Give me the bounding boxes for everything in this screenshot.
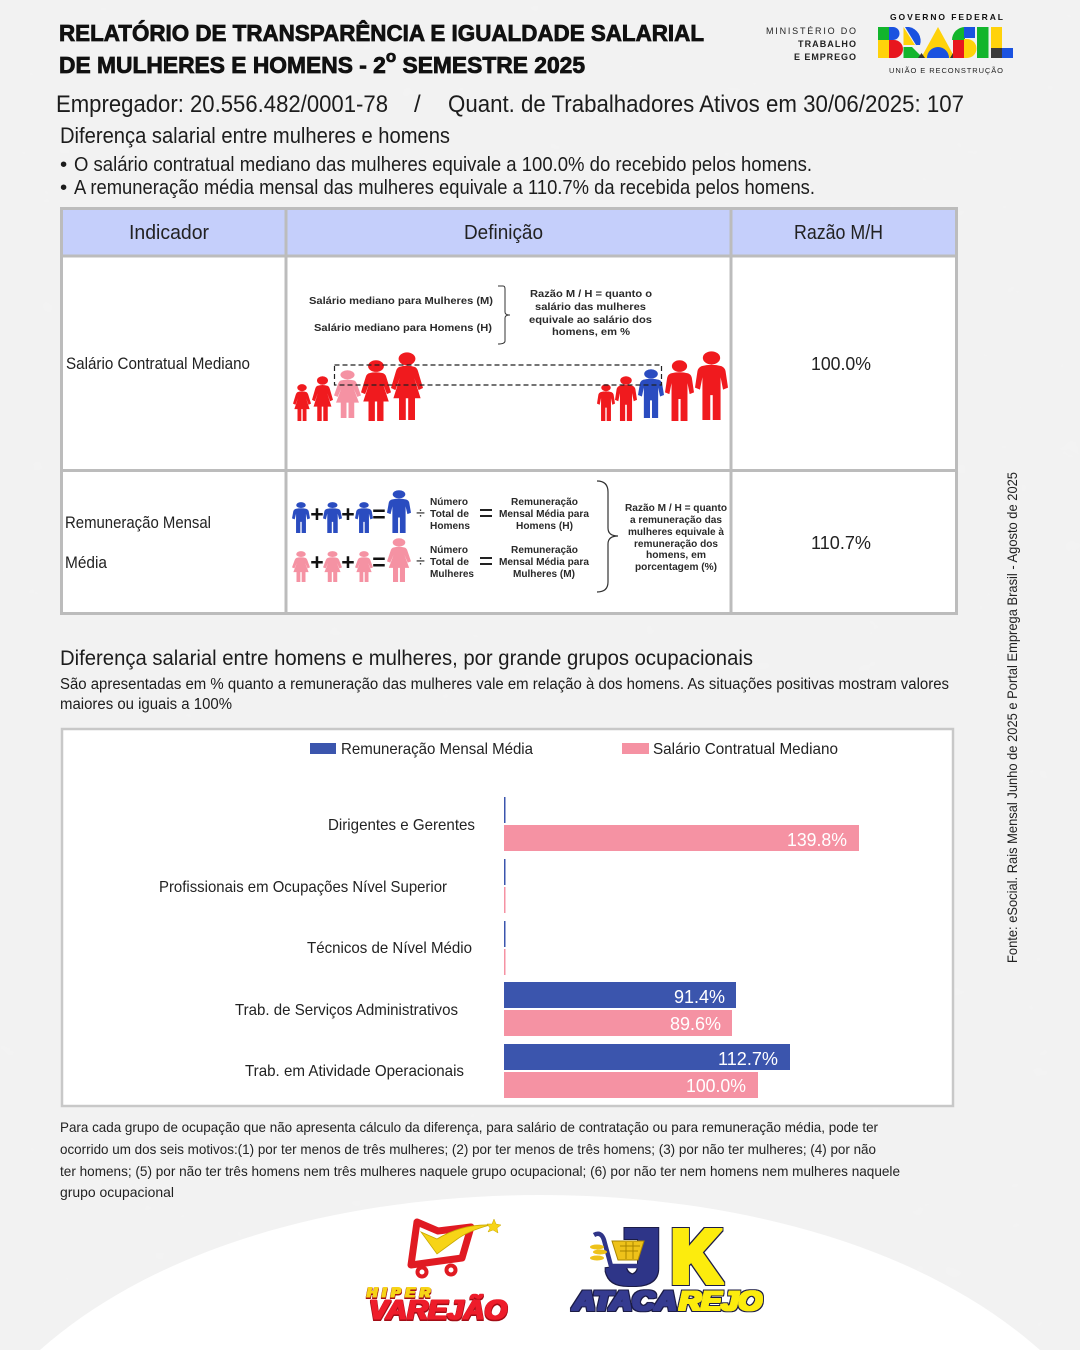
diagram: median salary definition: homens, em % <box>552 326 631 338</box>
chart description <box>60 676 949 713</box>
title: o <box>386 47 396 66</box>
chart value labels: 89.6% <box>670 1013 721 1034</box>
diagram: average pay definition: Mulheres (M) <box>513 569 575 580</box>
source note (vertical): Fonte: eSocial. Rais Mensal Junho de 2025 e Portal Emprega Brasil - Agosto de 2025 <box>1004 472 1020 963</box>
row: salário contratual mediano <box>66 353 871 374</box>
title: DE MULHERES E HOMENS - 2 <box>59 52 389 78</box>
chart category labels: Dirigentes e Gerentes <box>328 817 475 834</box>
table header: Indicador <box>129 222 209 244</box>
diagram: average pay definition: Remuneração <box>511 497 578 508</box>
diagram: median salary definition: equivale ao salário dos <box>529 314 652 326</box>
table header <box>129 222 883 244</box>
chart category labels: Técnicos de Nível Médio <box>307 940 472 957</box>
footnote <box>60 1119 900 1200</box>
footnote: Para cada grupo de ocupação que não apresenta cálculo da diferença, para salário de contratação ou para remuneração média, pode ter <box>60 1119 878 1135</box>
logo: Ministério do Trabalho e Emprego: TRABALHO <box>798 39 856 49</box>
row: remuneração mensal média: Remuneração Mensal <box>65 514 211 532</box>
chart bars <box>504 797 859 1098</box>
chart legend: Remuneração Mensal Média <box>341 741 533 758</box>
title: RELATÓRIO DE TRANSPARÊNCIA E IGUALDADE SALARIAL <box>59 19 704 46</box>
row: salário contratual mediano: Salário Contratual Mediano <box>66 355 250 373</box>
summary bullets <box>60 153 815 199</box>
logo: Hiper Varejão: HIPER <box>367 1284 431 1300</box>
diagram: average pay definition: Homens <box>430 521 470 532</box>
table header: Definição <box>464 222 543 244</box>
diagram: average pay definition: ÷ <box>416 553 425 570</box>
chart legend <box>310 741 838 758</box>
diagram: average pay definition: = <box>372 549 386 575</box>
diagram: average pay definition: Razão M / H = quanto <box>625 503 727 514</box>
diagram: average pay definition <box>292 481 727 592</box>
summary bullets: • <box>60 176 67 199</box>
diagram: average pay definition: homens, em <box>646 550 706 561</box>
chart value labels: 100.0% <box>686 1075 746 1096</box>
logo: Ministério do Trabalho e Emprego: MINISTÉRIO DO <box>766 26 856 36</box>
logo: Governo Federal Brasil <box>878 12 1013 75</box>
logo: Ministério do Trabalho e Emprego: E EMPREGO <box>794 52 856 62</box>
diagram: average pay definition: Remuneração <box>511 545 578 556</box>
panel: bar chart <box>62 729 953 1106</box>
table header: Razão M/H <box>794 222 883 244</box>
summary bullets: O salário contratual mediano das mulheres equivale a 100.0% do recebido pelos homens. <box>74 153 812 176</box>
diagram: average pay definition: mulheres equivale à <box>628 527 724 538</box>
diagram: average pay definition: + <box>341 501 355 527</box>
diagram: average pay definition: + <box>341 549 355 575</box>
title: SEMESTRE 2025 <box>396 52 585 78</box>
chart legend: Salário Contratual Mediano <box>653 741 838 758</box>
section heading: salary difference: Diferença salarial entre mulheres e homens <box>60 123 450 148</box>
diagram: average pay definition: ÷ <box>416 505 425 522</box>
diagram: average pay definition: a remuneração das <box>630 515 722 526</box>
diagram: median salary definition: salário das mulheres <box>535 301 646 313</box>
employer line: Empregador: 20.556.482/0001-78 <box>56 91 388 118</box>
diagram: average pay definition: Total de <box>430 557 469 568</box>
diagram: average pay definition: Mulheres <box>430 569 474 580</box>
panel: indicators table <box>61 208 957 614</box>
diagram: median salary definition: Razão M / H = quanto o <box>530 288 652 300</box>
title <box>59 19 704 78</box>
logo: JK Atacarejo: REJO <box>679 1286 762 1316</box>
logo: JK Atacarejo: K <box>671 1212 722 1301</box>
chart category labels <box>159 817 475 1080</box>
employer line <box>56 91 964 118</box>
logo: JK Atacarejo <box>572 1212 762 1316</box>
row: remuneração mensal média: Média <box>65 554 108 572</box>
chart value labels: 139.8% <box>787 829 847 850</box>
diagram: average pay definition: Total de <box>430 509 469 520</box>
chart description: maiores ou iguais a 100% <box>60 696 232 713</box>
section heading: occupational groups: Diferença salarial entre homens e mulheres, por grande grupos ocupacionais <box>60 647 753 670</box>
chart category labels: Trab. de Serviços Administrativos <box>235 1002 458 1019</box>
footnote: ter homens; (5) por não ter três homens nem três mulheres naquele grupo ocupacional; (6) por não ter nem homens nem mulheres naquele <box>60 1163 900 1179</box>
logo: Hiper Varejão <box>367 1219 507 1325</box>
chart description: São apresentadas em % quanto a remuneração das mulheres vale em relação à dos homens. As situações positivas mostram valores <box>60 676 949 693</box>
chart category labels: Profissionais em Ocupações Nível Superior <box>159 879 448 896</box>
diagram: average pay definition: remuneração dos <box>634 539 718 550</box>
diagram: average pay definition: Homens (H) <box>516 521 573 532</box>
logo: Governo Federal Brasil: UNIÃO E RECONSTRUÇÃO <box>889 66 1003 75</box>
summary bullets: • <box>60 153 67 176</box>
chart category labels: Trab. em Atividade Operacionais <box>245 1063 464 1080</box>
diagram: median salary definition: Salário mediano para Homens (H) <box>314 322 492 334</box>
logo: Governo Federal Brasil: GOVERNO FEDERAL <box>890 12 1003 22</box>
footnote: ocorrido um dos seis motivos:(1) por ter menos de três mulheres; (2) por ter menos de três homens; (3) por não ter mulheres; (4) por não <box>60 1141 876 1157</box>
employer line: Quant. de Trabalhadores Ativos em 30/06/2025: 107 <box>448 91 964 118</box>
logo: JK Atacarejo: ATACA <box>572 1286 677 1316</box>
row: remuneração mensal média: 110.7% <box>811 532 871 553</box>
diagram: average pay definition: Mensal Média para <box>499 557 589 568</box>
diagram: average pay definition: + <box>310 501 324 527</box>
logo: Ministério do Trabalho e Emprego <box>766 26 856 62</box>
row: salário contratual mediano: 100.0% <box>811 353 871 374</box>
diagram: average pay definition: Mensal Média para <box>499 509 589 520</box>
employer line: / <box>414 91 421 118</box>
chart value labels: 112.7% <box>718 1048 778 1069</box>
diagram: average pay definition: Número <box>430 497 468 508</box>
diagram: average pay definition: = <box>372 501 386 527</box>
diagram: average pay definition: porcentagem (%) <box>635 562 717 573</box>
diagram: median salary definition: Salário mediano para Mulheres (M) <box>309 295 493 307</box>
chart value labels: 91.4% <box>674 986 725 1007</box>
diagram: average pay definition: + <box>310 549 324 575</box>
footnote: grupo ocupacional <box>60 1184 174 1200</box>
chart value labels <box>670 829 847 1096</box>
logo: Hiper Varejão: VAREJÃO <box>369 1294 507 1325</box>
diagram: average pay definition: Número <box>430 545 468 556</box>
row: remuneração mensal média <box>65 514 871 572</box>
diagram: median salary definition <box>293 286 728 421</box>
summary bullets: A remuneração média mensal das mulheres equivale a 110.7% da recebida pelos homens. <box>74 176 815 199</box>
logo: JK Atacarejo: J <box>607 1212 662 1301</box>
